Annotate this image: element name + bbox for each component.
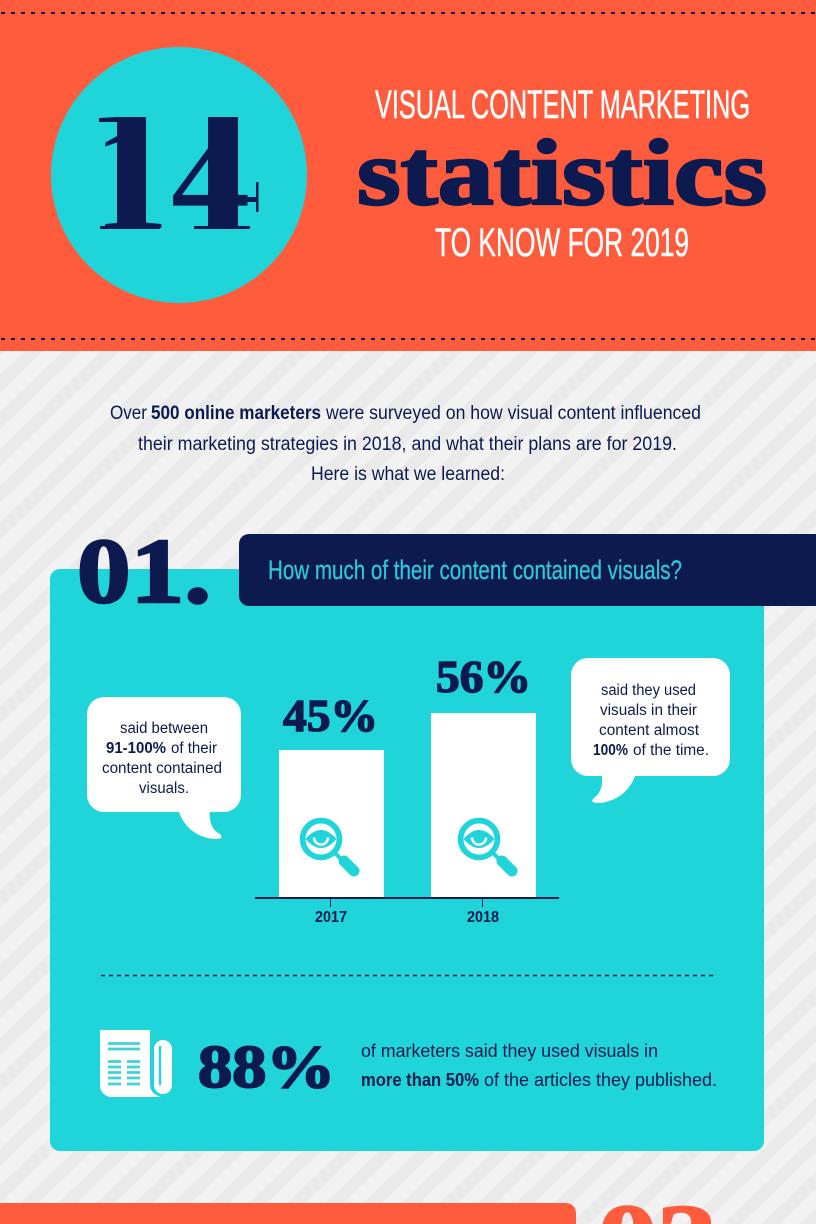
icon: teal circle with number 14: 1: [91, 90, 171, 262]
callout: right speech bubble: said they used: [601, 682, 696, 699]
stat: 88%: 88%: [198, 1034, 335, 1100]
stat description: [361, 1041, 717, 1090]
icon: newspaper: [100, 1030, 172, 1097]
intro text: [110, 403, 701, 485]
intro text: Here is what we learned:: [311, 464, 505, 485]
intro text: their marketing strategies in 2018, and what their plans are for 2019.: [138, 434, 677, 455]
number 01: 01.: [77, 520, 211, 622]
bar chart: 2017: [315, 909, 347, 926]
callout: left speech bubble: content contained: [102, 760, 222, 777]
callout: left speech bubble: [87, 697, 241, 839]
title: [357, 83, 767, 265]
question banner: [239, 534, 816, 606]
stat description: of the articles they published.: [484, 1070, 717, 1090]
stat description: more than 50%: [361, 1070, 479, 1090]
stat description: of marketers said they used visuals in: [361, 1041, 658, 1061]
icon: teal circle with number 14: 4: [170, 90, 250, 262]
callout: left speech bubble: of their: [171, 740, 217, 757]
panel: statistic 01: [50, 520, 816, 1151]
callout: right speech bubble: [571, 658, 730, 803]
bar chart: 45%: [283, 690, 378, 741]
callout: left speech bubble: visuals.: [139, 780, 189, 797]
icon: magnifier 2018: [461, 821, 512, 871]
intro text: 500 online marketers: [151, 403, 321, 424]
header banner: [0, 0, 816, 351]
callout: right speech bubble: content almost: [599, 722, 700, 739]
panel: statistic 02 (cropped): [0, 1186, 716, 1224]
bar chart: [255, 651, 559, 926]
callout: left speech bubble: said between: [120, 720, 208, 737]
callout: right speech bubble: 100%: [593, 742, 628, 759]
bar chart: 56%: [436, 651, 531, 702]
callout: right speech bubble: visuals in their: [600, 702, 697, 719]
intro text: Over: [110, 403, 148, 424]
title: TO KNOW FOR 2019: [435, 221, 689, 265]
callout: right speech bubble: of the time.: [633, 742, 709, 759]
icon: magnifier 2017: [303, 821, 354, 871]
icon: teal circle with number 14: [51, 47, 307, 303]
question banner: How much of their content contained visuals?: [268, 555, 682, 585]
callout: left speech bubble: 91-100%: [106, 740, 166, 757]
intro text: were surveyed on how visual content influenced: [325, 403, 701, 424]
bar chart: 2018: [467, 909, 499, 926]
title: statistics: [357, 122, 767, 225]
